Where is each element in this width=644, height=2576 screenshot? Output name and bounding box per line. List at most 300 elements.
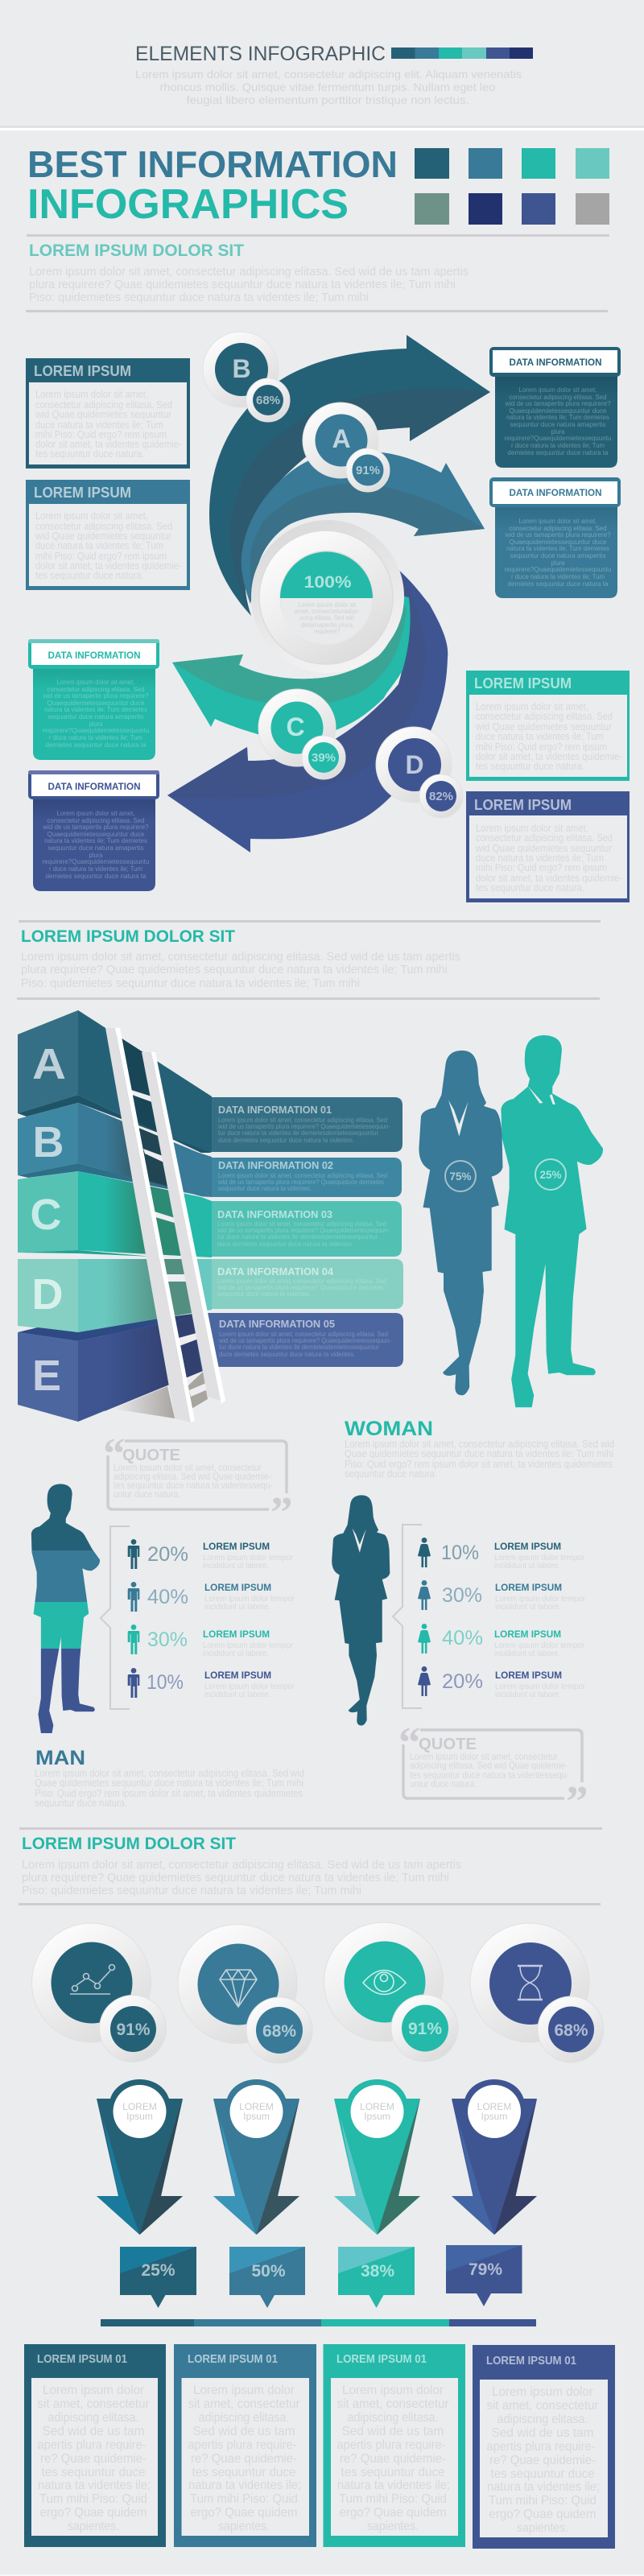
callout 38%: 38% (361, 2262, 394, 2281)
badge: eye icon 91%: 91% (408, 2020, 442, 2038)
panel: lorem box teal: dolor sit amet, ta videntes quidemie- (476, 751, 622, 762)
card 3 (324, 2344, 465, 2547)
badge: eye icon 91% (324, 1922, 458, 2062)
card 3: Lorem ipsum dolor (342, 2384, 444, 2397)
data bar 5: Lorem ipsum dolor sit amet, consectetur adipiscing elitasa. Sed (219, 1331, 388, 1338)
callout 25% (120, 2247, 196, 2308)
panel: lorem box dark teal: consectetur adipiscing elitasa. Sed (35, 399, 172, 411)
quote box 2: Lorem ipsum dolor sit amet, consectetur (410, 1751, 558, 1762)
panel: data information right 1: sequuntur duce natura amapertis (510, 421, 605, 428)
panel: data information left teal: consectetur adipiscing elitasa. Sed (47, 686, 145, 693)
panel: lorem box teal (466, 671, 630, 781)
card 3: Tum mihi Piso: Quid (339, 2492, 447, 2506)
block B (18, 1103, 212, 1198)
man row 30%: Lorem ipsum dolor tempor (203, 1641, 293, 1650)
callout 25%: 25% (141, 2261, 175, 2280)
header colour strip (391, 47, 533, 59)
panel: lorem box blue teal: consectetur adipiscing elitasa. Sed (35, 521, 172, 532)
panel: data information left indigo: demietes sequuntur duce natura ta (45, 873, 147, 880)
panel: lorem box teal: tes sequuntur duce natura. (476, 761, 584, 772)
panel: lorem box dark teal: duce natura ta videntes ile; Tum (35, 419, 163, 431)
section heading 3: Lorem ipsum dolor sit amet, consectetur adipiscing elitasa. Sed wid de us tam apertis (22, 1859, 461, 1872)
card 3: re? Quae quidemie- (340, 2452, 446, 2466)
woman row 10%: 10% (441, 1542, 479, 1564)
card 1: Lorem ipsum dolor (43, 2384, 145, 2397)
man bracket (101, 1526, 130, 1709)
card 1: Tum mihi Piso: Quid (39, 2492, 147, 2506)
badge: chart icon 91% (32, 1923, 166, 2062)
card 2: Lorem ipsum dolor (193, 2384, 295, 2397)
block D (18, 1259, 212, 1332)
card 4: Tum mihi Piso: Quid (489, 2494, 597, 2508)
card 1: apertis plura require- (37, 2438, 147, 2452)
card 3: tes sequuntur duce (341, 2466, 445, 2479)
panel: lorem box indigo (466, 791, 630, 902)
pointer arrow 3 (334, 2079, 420, 2235)
centre badge 100%: detamapertis plura (301, 621, 353, 629)
card 4: adipiscing elitasa. (497, 2413, 588, 2426)
data bar 1: tur duce natura ta videntes ile demietesdemietessequuntur (218, 1129, 378, 1137)
card 3: Sed wid de us tam (341, 2425, 444, 2438)
panel: lorem box dark teal: Lorem ipsum dolor sit amet, (35, 389, 148, 400)
panel: lorem box blue teal: LOREM IPSUM (34, 485, 131, 501)
panel: data information right 1: DATA INFORMATION (509, 358, 602, 368)
centre badge 100%: amet, consecteturadipi- (295, 608, 360, 615)
man row 20%: Lorem ipsum dolor tempor (203, 1553, 293, 1563)
woman row 40%: Lorem ipsum dolor tempor (494, 1641, 584, 1650)
data bar 5 (208, 1313, 403, 1367)
panel: lorem box indigo: tes sequuntur duce natura. (476, 882, 584, 894)
quote box 1: ” (270, 1488, 293, 1537)
panel: lorem box teal: LOREM IPSUM (474, 675, 572, 691)
silhouette: man with 25%: 25% (539, 1169, 562, 1181)
man row 10%: LOREM IPSUM (204, 1670, 271, 1681)
panel: data information right 1 (489, 347, 621, 468)
card 1: LOREM IPSUM 01 (37, 2352, 127, 2366)
panel: data information left teal: wid de us tamapertis plura requirere? (43, 692, 149, 700)
callout 50% (229, 2247, 305, 2308)
card 1: re? Quae quidemie- (40, 2452, 147, 2466)
card 3: sit amet, consectetur (336, 2397, 449, 2411)
block B: B (32, 1118, 64, 1166)
silhouette: man with 25% (501, 1035, 603, 1407)
panel: data information right 2 (489, 477, 621, 598)
panel: data information left indigo: requirere?Quaequidemietessequuntu (42, 858, 150, 865)
arrow: blue A (242, 448, 485, 604)
stacked blocks A to E (18, 1010, 212, 1422)
man row 40%: LOREM IPSUM (204, 1582, 271, 1593)
man row 30%: 30% (147, 1629, 188, 1651)
panel: data information left teal: plura (89, 720, 103, 728)
panel: data information right 2: consectetur adipiscing elitasa. Sed (509, 525, 607, 532)
data bar 2: sequuntur duce natura ta videntes. (218, 1185, 312, 1192)
panel: data information right 2: wid de us tamapertis plura requirere? (505, 531, 611, 539)
pointer arrow 4 (452, 2079, 537, 2235)
silhouette: woman with 75%: 75% (449, 1170, 472, 1183)
silhouette: striped man (31, 1484, 100, 1733)
panel: lorem box teal: duce natura ta videntes ile; Tum (476, 731, 604, 742)
woman row 20%: 20% (442, 1670, 483, 1693)
panel: lorem box dark teal: LOREM IPSUM (34, 363, 131, 379)
panel: lorem box indigo: mihi Piso: Quid ergo? rem ipsum (476, 862, 607, 873)
panel: data information right 2: demietes sequuntur duce natura ta (507, 580, 609, 588)
section heading 2: Piso: quidemietes sequuntur duce natura ta videntes ile; Tum mihi (21, 977, 360, 990)
card 4: sapientes. (517, 2521, 568, 2535)
panel: data information left indigo: r duce natura ta videntes ile; Tum (49, 865, 142, 873)
woman heading (345, 1418, 614, 1480)
man row 10%: 10% (147, 1671, 184, 1694)
woman heading: sequuntur duce natura. (345, 1468, 437, 1480)
woman row 30%: LOREM IPSUM (495, 1582, 562, 1593)
card 1: tes sequuntur duce (42, 2466, 146, 2479)
quote box 2: QUOTE (419, 1736, 477, 1753)
data bar 4: Lorem ipsum dolor sit amet, consectetur adipiscing elitasa. Sed (217, 1278, 386, 1285)
section heading 1: LOREM IPSUM DOLOR SIT (29, 242, 244, 260)
badge: hourglass icon 68%: 68% (554, 2021, 588, 2040)
panel: data information left teal: DATA INFORMATION (48, 651, 140, 661)
header paragraph: rhoncus mollis. Quisque vitae fermentum turpis. Nullam eget leo (159, 80, 496, 93)
panel: data information right 1: demietes sequuntur duce natura ta (507, 449, 609, 456)
card 1: Sed wid de us tam (42, 2425, 145, 2438)
section heading 2: LOREM IPSUM DOLOR SIT (21, 927, 235, 946)
panel: data information right 1: Lorem ipsum dolor sit amet, (518, 386, 597, 394)
woman bracket (393, 1525, 422, 1708)
ladder (105, 1028, 225, 1422)
card 4 (473, 2345, 615, 2549)
data bar 4: sequuntur duce natura ta videntes. (217, 1290, 311, 1298)
panel: data information left indigo: DATA INFORMATION (48, 782, 140, 792)
icon: diamond (220, 1970, 257, 2007)
panel: data information left teal: Lorem ipsum dolor sit amet, (56, 679, 135, 686)
quote box 1: untur duce natura. (114, 1488, 180, 1500)
quote box 1 (103, 1429, 293, 1537)
quote box 2: “ (398, 1718, 420, 1767)
man row 30% (128, 1624, 293, 1658)
panel: data information right 1: requirere?Quaequidemietessequuntu (504, 435, 612, 442)
man row 30%: incididunt ut labore. (203, 1649, 269, 1658)
pointer arrow 2: Ipsum (243, 2111, 270, 2122)
centre badge 100%: 100% (304, 573, 352, 592)
card 2: tes sequuntur duce (192, 2466, 296, 2479)
block E: E (32, 1352, 61, 1400)
woman row 40% (418, 1624, 584, 1658)
man row 20% (128, 1539, 293, 1571)
section heading 2: plura requirere? Quae quidemietes sequuntur duce natura ta videntes ile; Tum mihi (21, 964, 448, 976)
card 1 (24, 2344, 166, 2547)
quote box 2 (398, 1718, 588, 1826)
silhouette: dark woman (332, 1495, 390, 1726)
panel: data information left indigo: Lorem ipsum dolor sit amet, (56, 810, 135, 817)
panel: data information right 2: plura (551, 559, 565, 567)
badge D (376, 727, 463, 818)
man row 10%: Lorem ipsum dolor tempor (204, 1682, 295, 1691)
panel: lorem box indigo: Lorem ipsum dolor sit amet, (476, 823, 588, 834)
pointer arrow 3: LOREM (360, 2101, 394, 2112)
data bar 2: Lorem ipsum dolor sit amet, consectetur adipiscing elitasa. Sed (218, 1172, 387, 1179)
card 2: Tum mihi Piso: Quid (190, 2492, 298, 2506)
panel: data information right 2: requirere?Quaequidemietessequuntu (504, 566, 612, 573)
panel: data information right 1: r duce natura ta videntes ile; Tum (511, 442, 605, 449)
panel: lorem box dark teal: dolor sit amet, ta videntes quidemie- (35, 439, 182, 450)
section heading 1: Piso: quidemietes sequuntur duce natura ta videntes ile; Tum mihi (29, 291, 369, 304)
section heading 2 (21, 927, 460, 990)
data bar 2: DATA INFORMATION 02 (218, 1159, 333, 1171)
panel: data information left teal: sequuntur duce natura amapertis (48, 713, 143, 720)
panel: lorem box dark teal: wid Quae quidemietes sequuntur (35, 409, 171, 420)
data bar 3: wid de us tamapertis plura requirere? Quaequidemietessequun- (217, 1227, 390, 1234)
card 2: LOREM IPSUM 01 (188, 2352, 278, 2366)
panel: data information right 2: sequuntur duce natura amapertis (510, 552, 605, 559)
woman row 30%: 30% (442, 1584, 482, 1607)
man heading: Piso: Quid ergo? rem ipsum dolor sit amet, ta videntes quidemietes (35, 1788, 303, 1799)
card 3: sapientes. (367, 2520, 419, 2533)
callout 50%: 50% (251, 2262, 286, 2281)
panel: data information left teal: requirere?Quaequidemietessequuntu (42, 727, 150, 734)
card 2: apertis plura require- (188, 2438, 296, 2452)
block E (18, 1314, 203, 1422)
panel: lorem box dark teal: mihi Piso: Quid ergo? rem ipsum (35, 429, 167, 440)
panel: lorem box indigo: LOREM IPSUM (474, 797, 572, 813)
woman heading: Piso: Quid ergo? rem ipsum dolor sit amet, ta videntes quidemietes (345, 1459, 613, 1470)
arrow: teal C (172, 596, 411, 737)
panel: lorem box teal: Lorem ipsum dolor sit amet, (476, 701, 588, 712)
card 2: natura ta videntes ile; (188, 2479, 301, 2492)
woman row 40%: LOREM IPSUM (494, 1629, 561, 1640)
card 1: adipiscing elitasa. (48, 2411, 138, 2425)
card 4: apertis plura require- (486, 2440, 596, 2454)
header paragraph (135, 68, 522, 106)
section heading 3: Piso: quidemietes sequuntur duce natura ta videntes ile; Tum mihi (22, 1885, 361, 1897)
header paragraph: Lorem ipsum dolor sit amet, consectetur adipiscing elit. Aliquam venenatis (135, 68, 522, 80)
centre badge 100% (251, 520, 404, 673)
silhouette: woman with 75% (419, 1051, 502, 1395)
centre badge 100%: Lorem ipsum dolor sit (298, 601, 357, 609)
panel: data information left indigo: Quaequidemietessequuntur duce (47, 831, 145, 838)
badge B: 68% (256, 394, 280, 407)
section heading 2: Lorem ipsum dolor sit amet, consectetur adipiscing elitasa. Sed wid de us tam apertis (21, 951, 460, 964)
woman heading: Lorem ipsum dolor sit amet, consectetur adipiscing elitasa. Sed wid (345, 1439, 614, 1450)
woman row 20%: incididunt ut labore. (495, 1690, 561, 1699)
man row 20%: 20% (147, 1543, 188, 1566)
panel: data information right 2: DATA INFORMATION (509, 489, 602, 498)
panel: data information left indigo: sequuntur duce natura amapertis (48, 844, 143, 852)
header paragraph: feugiat libero elementum porttitor tristique non lectus. (187, 93, 469, 106)
centre badge 100%: scing elitasa. Sed wid (299, 614, 354, 621)
man heading (35, 1747, 304, 1809)
badge C: 39% (312, 751, 336, 765)
main title (27, 143, 398, 228)
header (135, 43, 533, 106)
main title: BEST INFORMATION (27, 143, 398, 185)
card 1: ergo? Quae quidem (40, 2506, 147, 2520)
data bar 3 (212, 1201, 402, 1257)
man row 40% (128, 1582, 295, 1612)
panel: data information left teal: r duce natura ta videntes ile; Tum (49, 734, 142, 741)
card 3: apertis plura require- (336, 2438, 446, 2452)
panel: lorem box blue teal: dolor sit amet, ta videntes quidemie- (35, 560, 182, 572)
data bar 5: DATA INFORMATION 05 (219, 1318, 335, 1330)
header title: ELEMENTS INFOGRAPHIC (135, 43, 386, 65)
data bar 3: DATA INFORMATION 03 (217, 1208, 332, 1220)
panel: lorem box teal: consectetur adipiscing elitasa. Sed (476, 711, 613, 722)
panel: data information left teal: demietes sequuntur duce natura ta (45, 741, 147, 749)
man row 10% (128, 1668, 295, 1699)
pointer arrow 2 (213, 2079, 299, 2235)
card 4: ergo? Quae quidem (489, 2508, 596, 2521)
badge: chart icon 91%: 91% (116, 2021, 151, 2039)
card 4: tes sequuntur duce (491, 2467, 595, 2481)
panel: lorem box indigo: wid Quae quidemietes sequuntur (475, 843, 612, 854)
card 4: re? Quae quidemie- (489, 2454, 596, 2467)
card 2: sapientes. (218, 2520, 270, 2533)
quote box 2: tes sequuntur duce natura ta videntessequ- (410, 1769, 569, 1781)
panel: data information right 2: Lorem ipsum dolor sit amet, (518, 518, 597, 525)
card 2: ergo? Quae quidem (190, 2506, 298, 2520)
panel: data information left teal: Quaequidemietessequuntur duce (47, 700, 145, 707)
panel: data information right 1: plura (551, 428, 565, 436)
man stats (128, 1539, 295, 1699)
card 2: adipiscing elitasa. (198, 2411, 290, 2425)
panel: lorem box blue teal: mihi Piso: Quid ergo? rem ipsum (35, 551, 167, 562)
panel: data information right 2: r duce natura ta videntes ile; Tum (511, 573, 605, 580)
data bar 1: Lorem ipsum dolor sit amet, consectetur adipiscing elitasa. Sed (218, 1117, 387, 1124)
card 1: sit amet, consectetur (37, 2397, 150, 2411)
data bar 2: wid de us tamapertis plura requirere? Quaequiduce demietes (217, 1179, 384, 1186)
card 3: adipiscing elitasa. (348, 2411, 438, 2425)
badge A (303, 402, 390, 492)
main title: INFOGRAPHICS (27, 181, 349, 228)
pointer arrow 1 (97, 2079, 183, 2235)
man row 20%: LOREM IPSUM (203, 1541, 270, 1552)
panel: data information right 1: consectetur adipiscing elitasa. Sed (509, 394, 607, 401)
badge D: D (405, 750, 424, 779)
card 1: natura ta videntes ile; (38, 2479, 151, 2492)
data bar 4: DATA INFORMATION 04 (217, 1265, 334, 1278)
woman row 20% (418, 1666, 585, 1699)
badge: hourglass icon 68% (470, 1923, 604, 2062)
panel: lorem box blue teal: wid Quae quidemietes sequuntur (35, 530, 171, 542)
block A (18, 1010, 212, 1153)
panel: lorem box dark teal (26, 358, 190, 469)
arrow: indigo D (167, 568, 448, 852)
badge A: A (332, 424, 351, 453)
panel: data information left indigo: wid de us tamapertis plura requirere? (43, 824, 149, 831)
panel: data information right 2: natura ta videntes ile; Tum demietes (506, 545, 609, 552)
panel: data information right 1: natura ta videntes ile; Tum demietes (506, 414, 609, 421)
woman row 10% (418, 1538, 584, 1571)
block C: C (31, 1191, 61, 1239)
badge A: 91% (356, 464, 380, 477)
panel: data information left indigo: consectetur adipiscing elitasa. Sed (47, 817, 145, 824)
section heading 1 (29, 242, 469, 304)
quote box 2: ” (566, 1777, 588, 1826)
data bar 4 (212, 1259, 403, 1309)
data bar 5: wid de us tamapertis plura requirere? Quaequidemietessequun- (218, 1337, 391, 1344)
badge B (203, 332, 290, 422)
card 3: natura ta videntes ile; (337, 2479, 450, 2492)
callout 79% (446, 2245, 522, 2306)
card 4: Lorem ipsum dolor (492, 2385, 594, 2399)
quote box 1: tes sequuntur duce natura ta videntessequ- (114, 1480, 273, 1491)
man row 10%: incididunt ut labore. (204, 1690, 270, 1699)
man heading: MAN (35, 1747, 85, 1769)
panel: data information left indigo: natura ta videntes ile; Tum demietes (44, 837, 147, 844)
icon: eye (363, 1971, 406, 1995)
card 1: sapientes. (68, 2520, 119, 2533)
centre badge 100%: requirere? (314, 628, 340, 635)
woman row 10%: Lorem ipsum dolor tempor (494, 1553, 584, 1563)
callout 79%: 79% (469, 2260, 502, 2279)
card 3: LOREM IPSUM 01 (336, 2352, 427, 2366)
section heading 1: Lorem ipsum dolor sit amet, consectetur adipiscing elitasa. Sed wid de us tam apertis (29, 266, 469, 279)
panel: lorem box indigo: consectetur adipiscing elitasa. Sed (476, 832, 613, 844)
card 4: natura ta videntes ile; (487, 2480, 600, 2494)
man row 40%: Lorem ipsum dolor tempor (204, 1594, 295, 1604)
data bar 3: Lorem ipsum dolor sit amet, consectetur adipiscing elitasa. Sed (217, 1220, 386, 1228)
man heading: sequuntur duce natura. (35, 1798, 127, 1809)
block D: D (32, 1270, 63, 1319)
pointer arrow 3: Ipsum (364, 2111, 390, 2122)
panel: lorem box blue teal: duce natura ta videntes ile; Tum (35, 540, 163, 551)
woman row 30%: incididunt ut labore. (495, 1602, 561, 1612)
panel: lorem box indigo: dolor sit amet, ta videntes quidemie- (476, 873, 622, 884)
data bar 3: tur duce natura ta videntes ile demietesdemietessequuntur (217, 1233, 378, 1241)
woman row 40%: incididunt ut labore. (494, 1649, 560, 1658)
panel: data information right 1: wid de us tamapertis plura requirere? (505, 400, 611, 407)
block A: A (32, 1040, 66, 1088)
quote box 1: QUOTE (122, 1447, 180, 1464)
woman row 20%: Lorem ipsum dolor tempor (495, 1682, 585, 1691)
panel: lorem box teal: mihi Piso: Quid ergo? rem ipsum (476, 741, 607, 753)
data bar 3: duce demietes sequuntur duce natura ta videntes. (217, 1241, 353, 1248)
woman row 30% (418, 1580, 585, 1612)
badge C: C (286, 712, 305, 741)
callout 38% (338, 2247, 415, 2308)
man row 30%: LOREM IPSUM (203, 1629, 270, 1640)
quote box 2: untur duce natura. (410, 1778, 477, 1790)
woman row 30%: Lorem ipsum dolor tempor (495, 1594, 585, 1604)
data bar 1: DATA INFORMATION 01 (218, 1104, 332, 1116)
badge C (258, 689, 345, 779)
panel: lorem box teal: wid Quae quidemietes sequuntur (475, 721, 612, 733)
data bar 5: tur duce natura ta videntes ile demietesdemietessequuntur (219, 1344, 379, 1351)
panel: data information right 1: Quaequidemietessequuntur duce (509, 407, 607, 415)
panel: lorem box dark teal: tes sequuntur duce natura. (35, 448, 144, 460)
woman row 20%: LOREM IPSUM (495, 1670, 562, 1681)
card 4: sit amet, consectetur (486, 2399, 599, 2413)
woman heading: Quae quidemietes sequuntur duce natura ta videntes ile; Tum mihi (345, 1448, 613, 1459)
panel: lorem box indigo: duce natura ta videntes ile; Tum (476, 852, 604, 864)
man row 40%: 40% (147, 1586, 188, 1608)
woman stats (418, 1538, 585, 1699)
woman row 40%: 40% (442, 1627, 483, 1649)
pointer arrow 4: LOREM (477, 2101, 511, 2112)
section heading 3: plura requirere? Quae quidemietes sequuntur duce natura ta videntes ile; Tum mihi (22, 1872, 449, 1885)
card 4: LOREM IPSUM 01 (486, 2354, 576, 2368)
card 4: Sed wid de us tam (491, 2426, 594, 2440)
colour swatches (415, 148, 609, 225)
quote box 1: “ (103, 1429, 126, 1478)
progress bar (101, 2319, 536, 2326)
pointer arrow 1: LOREM (122, 2101, 157, 2112)
man heading: Lorem ipsum dolor sit amet, consectetur adipiscing elitasa. Sed wid (35, 1768, 304, 1779)
data bar 4: wid de us tamapertis plura requirere? Quaequiduce demietes (217, 1284, 383, 1291)
quote box 1: Lorem ipsum dolor sit amet, consectetur (114, 1462, 262, 1473)
panel: data information left teal: natura ta videntes ile; Tum demietes (44, 706, 147, 713)
badge D: 82% (429, 790, 453, 803)
ladder shadow (113, 1372, 208, 1418)
section heading 3: LOREM IPSUM DOLOR SIT (22, 1835, 236, 1853)
